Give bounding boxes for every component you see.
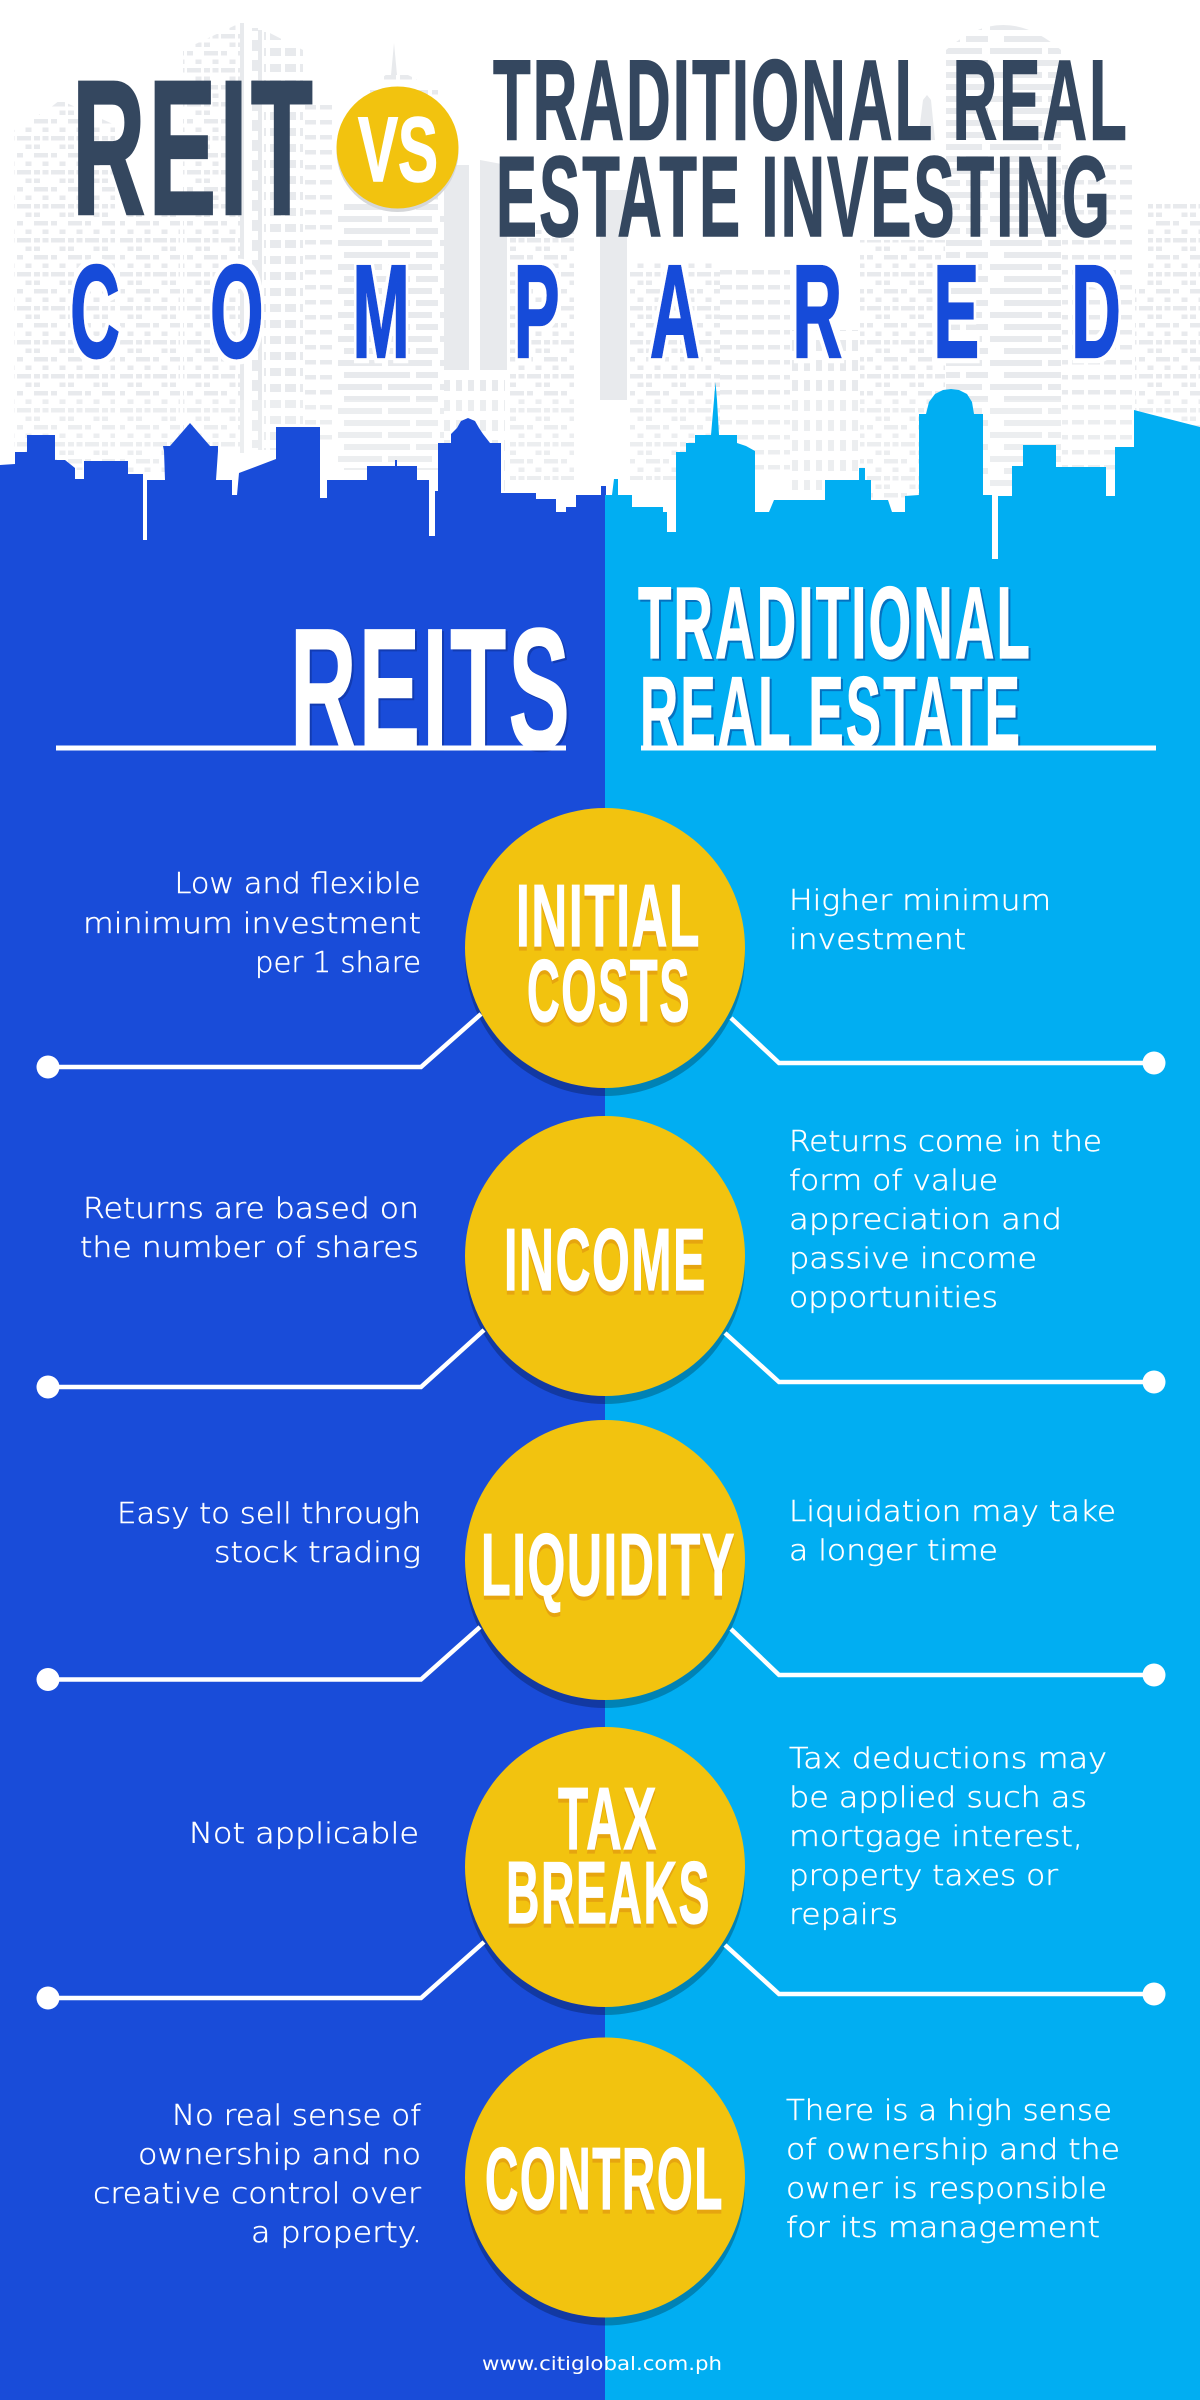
footer: website: www.citiglobal.com.ph [482, 2353, 722, 2375]
REIT text: control: No real sense of [172, 2099, 421, 2132]
REIT text: liquidity [117, 1497, 421, 1569]
traditional text: control: There is a high sense [786, 2094, 1112, 2127]
heading: REITs: REITS [290, 593, 572, 785]
right connector [731, 1629, 1166, 1686]
panel: REITs blue side with skyline [0, 418, 606, 2400]
REIT text: control: a property. [251, 2216, 422, 2249]
heading: traditional real estate [638, 566, 1156, 767]
row: liquidity [36, 1420, 1166, 1708]
row: income [36, 1116, 1166, 1404]
traditional text: income: opportunities [789, 1281, 998, 1314]
REIT text: initial costs [83, 867, 421, 979]
REIT text: initial costs: minimum investment [83, 907, 421, 940]
badge: tax breaks: BREAKS [506, 1843, 711, 1942]
traditional text: control: owner is responsible [786, 2172, 1107, 2205]
left connector [36, 1942, 484, 2010]
traditional text: income: form of value [789, 1164, 998, 1197]
traditional text: tax breaks [789, 1742, 1107, 1931]
traditional text: initial costs: investment [789, 923, 966, 956]
REIT text: tax breaks: Not applicable [189, 1817, 419, 1850]
traditional text: income: Returns come in the [789, 1125, 1102, 1158]
REIT text: liquidity: Easy to sell through [117, 1497, 421, 1530]
heading: REITs [56, 593, 572, 785]
traditional text: income: appreciation and [789, 1203, 1062, 1236]
traditional text: income [789, 1125, 1102, 1314]
badge: income: INCOME [504, 1210, 707, 1309]
REIT text: control: creative control over [93, 2177, 421, 2210]
REIT text: control [93, 2099, 422, 2249]
title: compared: COMPARED [70, 239, 1121, 386]
left connector [36, 1627, 480, 1691]
REIT text: income: Returns are based on [83, 1192, 419, 1225]
traditional text: tax breaks: mortgage interest, [789, 1820, 1083, 1853]
row: tax breaks [36, 1727, 1166, 2015]
title: REIT: REIT [72, 40, 316, 255]
traditional text: tax breaks: property taxes or [789, 1859, 1058, 1892]
badge: tax breaks [465, 1727, 745, 2007]
right connector [731, 1018, 1166, 1074]
left connector [36, 1014, 481, 1078]
title: traditional real estate investing [493, 38, 1129, 261]
traditional text: tax breaks: be applied such as [789, 1781, 1087, 1814]
badge: control [465, 2038, 745, 2318]
REIT text: liquidity: stock trading [214, 1536, 421, 1569]
circle shadow [465, 1735, 745, 2015]
icon: VS badge [336, 86, 458, 212]
badge: income [465, 1116, 745, 1396]
icon: VS badge: VS [358, 99, 438, 201]
row: control [93, 2038, 1120, 2326]
traditional text: control: for its management [786, 2211, 1100, 2244]
REIT text: income [80, 1192, 419, 1264]
badge: initial costs: INITIAL [516, 866, 701, 965]
REIT text: control: ownership and no [138, 2138, 421, 2171]
badge: liquidity [465, 1420, 745, 1700]
badge: initial costs: COSTS [527, 941, 691, 1040]
traditional text: liquidity: a longer time [789, 1534, 998, 1567]
traditional text: initial costs [789, 884, 1051, 956]
REIT text: initial costs: Low and flexible [174, 867, 420, 900]
badge: tax breaks: TAX [558, 1769, 658, 1868]
right connector [725, 1333, 1166, 1394]
badge: liquidity: LIQUIDITY [481, 1515, 736, 1614]
row: initial costs [36, 808, 1166, 1096]
traditional text: tax breaks: repairs [789, 1898, 898, 1931]
REIT text: income: the number of shares [80, 1231, 419, 1264]
traditional text: control [786, 2094, 1120, 2244]
traditional text: control: of ownership and the [786, 2133, 1120, 2166]
panel: traditional real estate light blue side with skyline [605, 382, 1200, 2400]
background: pale city buildings [0, 23, 1200, 560]
left connector [36, 1330, 484, 1398]
right connector [725, 1945, 1166, 2006]
traditional text: income: passive income [789, 1242, 1037, 1275]
REIT text: initial costs: per 1 share [255, 946, 421, 979]
circle shadow [465, 1124, 745, 1404]
traditional text: initial costs: Higher minimum [789, 884, 1051, 917]
badge: initial costs [465, 808, 745, 1088]
badge: control: CONTROL [485, 2129, 724, 2228]
traditional text: liquidity: Liquidation may take [789, 1495, 1116, 1528]
circle shadow [465, 816, 745, 1096]
traditional text: liquidity [789, 1495, 1116, 1567]
circle shadow [465, 1428, 745, 1708]
circle shadow [465, 2046, 745, 2326]
traditional text: tax breaks: Tax deductions may [789, 1742, 1107, 1775]
